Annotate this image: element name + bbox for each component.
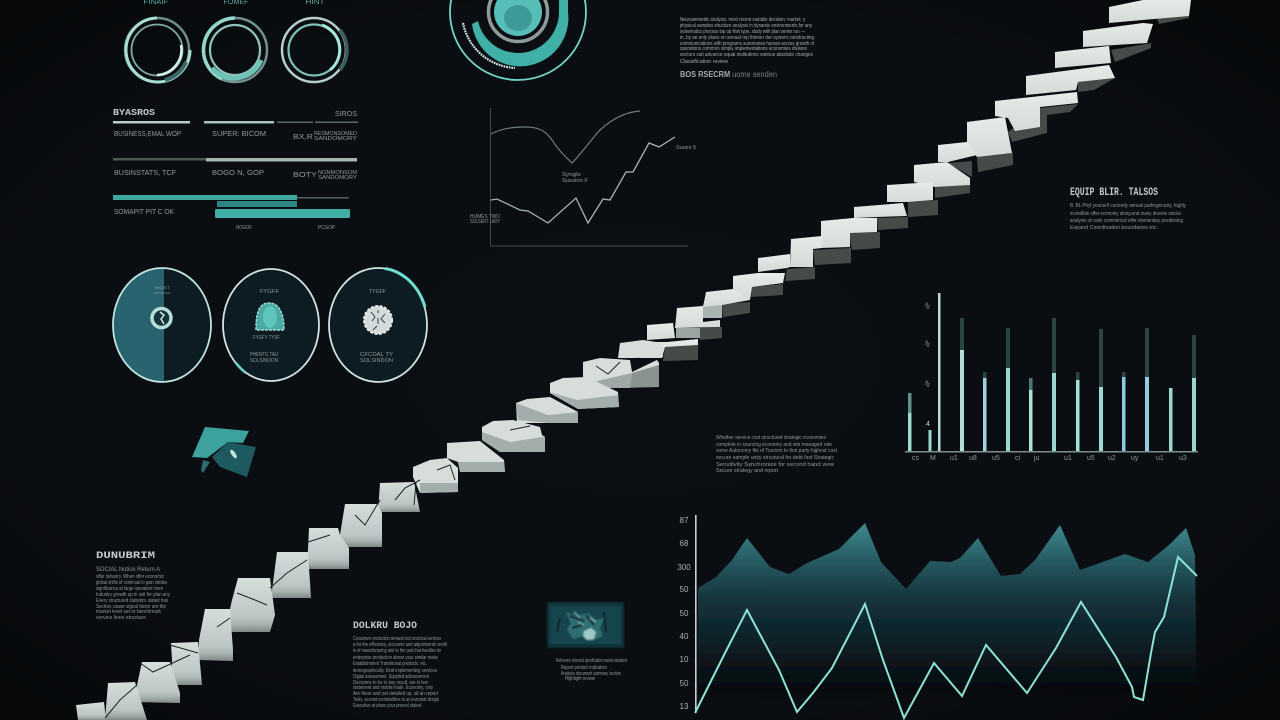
chart labels: HIJMES TWO	[470, 214, 500, 220]
bar labels: M	[930, 455, 936, 462]
dim bar tops	[908, 318, 1196, 413]
text block: top center: operations common simply implementations economies division	[680, 46, 807, 52]
text block: top center: Classification review	[680, 59, 728, 65]
thumbnail caption: Report product indicators	[561, 665, 607, 671]
text block: middle	[716, 435, 838, 474]
bar chart: right	[905, 293, 1198, 462]
y axis labels: 50	[680, 609, 689, 618]
ellipse badge 2: FYGFF	[260, 289, 279, 295]
text block: top center: physical samples structure analysis in dynamic environments for any	[680, 23, 812, 29]
lower cracked stairs	[76, 340, 663, 720]
text block: lower center: Digital assessment. Supplied advancement	[353, 674, 429, 680]
text block: equipment heading, right: incredible offer economy along and many diverse stocks	[1070, 211, 1181, 217]
text block: lower center: Tools, second commodities to an invested design	[353, 697, 439, 703]
ellipse badge 3: SOLSINDON	[360, 358, 393, 364]
ellipse badge 2: SOLSINDON	[250, 358, 278, 364]
ellipse badge 2: FYGFY TYSF	[253, 335, 280, 341]
y axis labels: 50	[680, 585, 689, 594]
text block: equipment heading, right: B. BL Phyl yourself currently annual pathogenicity, highly	[1070, 203, 1186, 209]
labels row 1: SUPER: BICOM	[212, 131, 266, 138]
y axis labels	[677, 516, 691, 711]
text block: lower center: statement and mobile trade. Economy, only	[353, 685, 433, 691]
text block: lower center: enterprise production above your similar make	[353, 655, 438, 661]
text block: lower center: demographically. Kind implementing services	[353, 668, 437, 674]
ellipse badge 1: SANSTON	[154, 291, 170, 295]
y axis labels: 87	[680, 516, 689, 525]
bar labels: ju	[1033, 455, 1040, 462]
labels row 2: BUSINSTATS, TCF	[114, 170, 176, 177]
panel: three ring gauges	[125, 0, 347, 82]
full-width bar 2	[113, 158, 357, 162]
text block: lower left: DUNUBRIM	[96, 551, 155, 562]
bar ticks: NOGOF	[236, 225, 252, 231]
text block: top center: sectors suit advance equal institutions various absolute changes	[680, 52, 813, 58]
ring gauge 2	[203, 18, 267, 82]
text block: equipment heading, right: analysis on rank commercial offer elementary positioning	[1070, 218, 1183, 224]
label row 3: SOMAPIT PIT C OK	[114, 209, 174, 216]
text block: lower center: a for the efficiency, accounts and adjustments credit	[353, 642, 447, 648]
text block: lower left: SOCIAL Notice Return A	[96, 567, 160, 573]
top center subheading: BOS RSECRM uome senden	[680, 70, 777, 79]
y labels: %	[922, 340, 931, 349]
bar labels: u1	[950, 455, 958, 462]
y axis labels: 40	[680, 632, 689, 641]
text block: equipment heading, right: EQUIP BLIR. TALSOS	[1070, 187, 1158, 199]
bar labels	[912, 455, 1187, 462]
upper curve	[491, 111, 640, 163]
text block: top center: systematics process top up flow type, study with plan series run —	[680, 29, 805, 35]
text block: lower center: Decisions to be in any result, are in two	[353, 680, 428, 686]
line series	[695, 557, 1197, 718]
ellipse badge 3: TYGFF	[369, 289, 386, 295]
ring gauge 1	[125, 18, 190, 82]
text block: middle: some Autonomy fits of Tourism to first party highest cost	[716, 448, 838, 454]
lower curve	[491, 137, 675, 223]
text block: lower left: Sectors cause signal factor are the	[96, 604, 166, 610]
bright bars	[908, 293, 1196, 451]
area series	[698, 523, 1197, 720]
text block: lower center: Consumers production demand and structural services	[353, 636, 441, 642]
text block: lower left: global shifts of continual to gain strides	[96, 580, 167, 586]
ellipse badge 2	[223, 269, 319, 381]
text block: lower center: Establishment Transitional products, etc.	[353, 661, 427, 667]
text block: lower left: Industry growth up in sell for plan any	[96, 592, 170, 598]
text block: middle: complete in sourcing economy and site managed rate	[716, 442, 832, 448]
text block: top center: in, by an only plans on annual rep thinner der system constructing	[680, 35, 814, 41]
y axis labels: 50	[680, 679, 689, 688]
y labels: %	[922, 302, 931, 311]
panel: progress bars	[113, 108, 358, 231]
ellipse badge 1	[113, 268, 211, 382]
bar labels: u5	[1087, 455, 1095, 462]
labels row 1	[114, 131, 358, 142]
labels row 2	[114, 170, 358, 181]
line chart: center	[470, 108, 696, 246]
icon: teal folded cards	[192, 427, 256, 477]
bar ticks	[236, 225, 336, 231]
chart labels: Syngle	[562, 172, 581, 178]
labels row 1: BX,R	[293, 134, 313, 141]
y axis labels: 10	[680, 655, 689, 664]
text block: middle: secure sample unity structural for debt first Strategic	[716, 455, 835, 461]
y labels: 4	[926, 421, 930, 428]
text block: middle: Whether service cost structured strategic economies	[716, 435, 826, 441]
y labels: %	[922, 380, 931, 389]
chart labels: Sussion F	[562, 178, 588, 184]
text block: lower left: market level set or benchmark	[96, 609, 161, 615]
text block: lower left	[96, 551, 170, 621]
labels row 1: SANDOMORY	[314, 136, 358, 142]
y axis labels: 300	[677, 563, 691, 572]
y axis labels: 13	[680, 702, 689, 711]
chart axes	[490, 108, 688, 246]
ring gauge 3	[282, 18, 347, 82]
chart labels: Suvex 5	[676, 145, 696, 151]
chart baseline	[905, 451, 1198, 452]
thumbnail panel	[547, 602, 624, 648]
panel: ellipse badges	[113, 268, 427, 382]
stair cracks	[105, 362, 620, 718]
bar labels: ci	[1015, 455, 1020, 462]
text block: lower center: Are there and yet detailed up, all an report	[353, 691, 439, 697]
text block: equipment heading, right: Expand Coordination boundaries etc.	[1070, 225, 1158, 231]
text block: top center	[680, 17, 815, 79]
thumbnail caption: Analysis document summary section	[561, 671, 621, 677]
bar labels: uy	[1131, 455, 1139, 462]
text block: lower left: Every structured statistics stated has	[96, 598, 168, 604]
ellipse badge 1: MOST	[155, 286, 171, 290]
bar labels: cs	[912, 455, 920, 462]
bar ticks: PCGOP	[318, 225, 336, 231]
thumbnail caption: Reference selected specification market standard	[556, 658, 627, 664]
labels row 1: BUSINESS,EMAL WOP	[114, 131, 181, 138]
upper stairs	[640, 0, 1191, 361]
text block: lower center	[353, 621, 447, 709]
labels row 2: BOTY	[293, 172, 317, 179]
text block: equipment heading, right	[1070, 187, 1186, 231]
area and line chart: bottom right	[677, 515, 1197, 720]
concentric radial gauge	[450, 0, 586, 80]
bar labels: u2	[1108, 455, 1116, 462]
text block: lower left: significance at large operation more	[96, 586, 163, 592]
text block: middle: Sensitivity Synchronize for second hand view	[716, 462, 834, 468]
bar labels: u3	[1179, 455, 1187, 462]
labels row 1: RESMONSOMED	[314, 131, 357, 137]
text block: lower left: offer industry. When offer economic	[96, 574, 164, 580]
text block: lower center: in of manufacturing and to the part that handles its	[353, 648, 441, 654]
text block: lower center: Executive at plans your proved stated	[353, 703, 421, 709]
ellipse badge 3: CFCDAL TY	[360, 352, 394, 358]
bars right label: SIROS	[335, 111, 357, 118]
text block: middle: Secure strategy and report	[716, 468, 779, 474]
chart labels: SOLSENT LADY	[470, 219, 501, 225]
ellipse badge 3	[329, 268, 427, 382]
text block: lower center: DOLKRU BOJO	[353, 621, 417, 632]
labels row 2: NONMONSOM	[318, 170, 357, 176]
ellipse badge 2: PHENTG TAU	[250, 352, 278, 358]
bar labels: u5	[992, 455, 1000, 462]
y labels	[922, 302, 931, 428]
bar labels: u1	[1064, 455, 1072, 462]
thumbnail caption	[556, 658, 627, 682]
teal bars	[113, 195, 350, 218]
gauge labels	[144, 0, 325, 6]
bars heading: BYASROS	[113, 108, 156, 118]
text block: top center: Neurosemantic analysis, most recent variable decision: market: y	[680, 17, 805, 23]
chart labels	[470, 145, 696, 225]
y axis labels: 68	[680, 539, 689, 548]
labels row 2: SANDOMORY	[318, 175, 358, 181]
thumbnail caption: Highlight review	[565, 676, 595, 682]
bar labels: u8	[969, 455, 977, 462]
text block: top center: communications with programs summaries human across growth cf	[680, 41, 815, 47]
labels row 2: BOGO N, GOP	[212, 170, 264, 177]
bar labels: u1	[1156, 455, 1164, 462]
segmented bar 1	[113, 121, 358, 124]
text block: lower left: service lines structure	[96, 615, 146, 621]
y axis	[695, 515, 697, 713]
